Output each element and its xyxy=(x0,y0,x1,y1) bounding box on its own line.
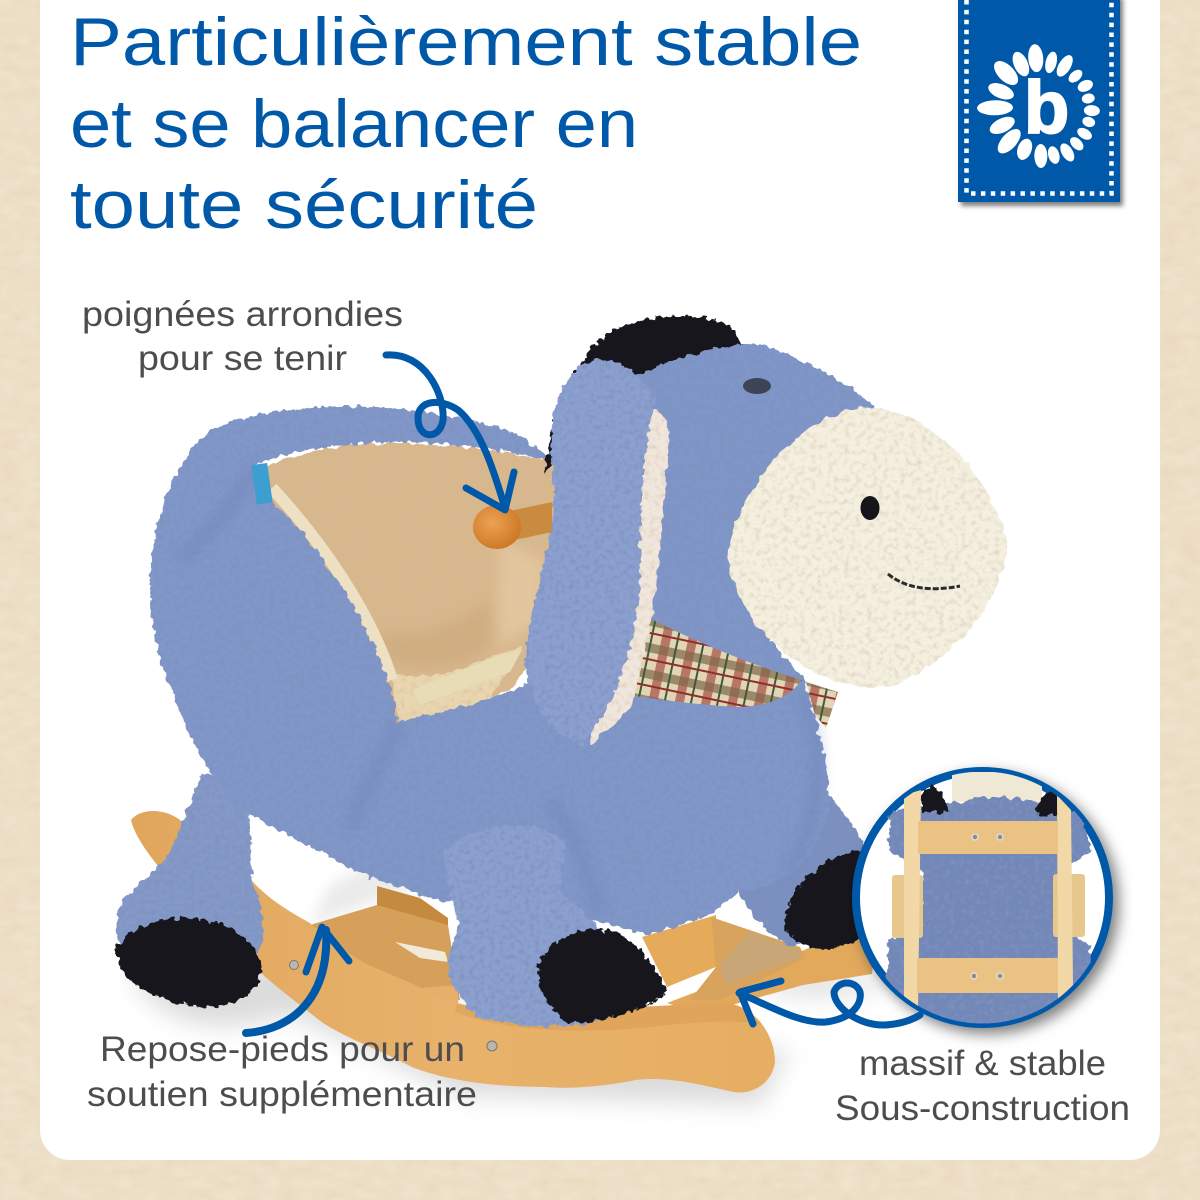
label: footrest: Repose-pieds pour un xyxy=(100,1030,465,1069)
inset screws xyxy=(971,834,1003,979)
inset rails xyxy=(904,790,921,1010)
arrow: footrest xyxy=(246,927,349,1033)
seat label xyxy=(251,463,273,505)
wooden support block xyxy=(642,915,716,987)
ear xyxy=(525,359,669,745)
footrest board xyxy=(310,905,460,1008)
rocker screws xyxy=(290,960,497,1051)
seat bottom cushion xyxy=(390,645,525,725)
arrow: underside xyxy=(739,981,920,1025)
title: toute sécurité xyxy=(70,167,538,243)
inset hooves xyxy=(922,786,1058,815)
inset side pads xyxy=(892,875,923,938)
title: Particulièrement stable xyxy=(70,4,862,80)
head xyxy=(606,344,882,682)
muzzle xyxy=(728,407,1006,688)
far back leg xyxy=(738,775,868,945)
inset cream muzzle xyxy=(952,772,1042,802)
front rocker xyxy=(131,811,775,1093)
rear leg xyxy=(116,772,263,980)
front leg xyxy=(444,826,620,1027)
inset plush body xyxy=(885,797,1095,1040)
plank recess xyxy=(720,932,800,985)
logo letter: b xyxy=(1024,66,1069,149)
arrow: handle xyxy=(386,355,514,510)
scarf xyxy=(630,612,838,728)
seat floor shade xyxy=(380,600,500,668)
logo flower xyxy=(977,44,1100,168)
label: footrest: soutien supplémentaire xyxy=(87,1075,477,1114)
label: handles: pour se tenir xyxy=(138,339,347,378)
rocking donkey xyxy=(116,316,1006,1105)
inset circle: underside xyxy=(856,771,1109,1040)
post shadow xyxy=(310,860,420,925)
rear hoof xyxy=(116,918,261,1007)
label: underside: Sous-construction xyxy=(835,1089,1130,1128)
ear outer xyxy=(525,359,655,745)
title xyxy=(70,4,862,243)
back rocker xyxy=(667,937,876,1014)
seat inner xyxy=(262,444,565,735)
label: underside: massif & stable xyxy=(859,1044,1106,1083)
inset top bar xyxy=(918,821,1058,854)
inset disc xyxy=(856,771,1109,1024)
floor shadows xyxy=(130,960,880,1105)
wooden post rear xyxy=(377,886,448,945)
label: underside xyxy=(835,1044,1130,1128)
body fold shading xyxy=(180,465,818,915)
front hoof xyxy=(538,929,667,1023)
seat strap xyxy=(412,650,522,705)
wooden handle xyxy=(473,502,552,549)
far foot xyxy=(783,850,864,949)
label: footrest xyxy=(87,1030,477,1114)
title: et se balancer en xyxy=(70,86,638,162)
inset bottom bar xyxy=(917,958,1058,993)
rear cross plank xyxy=(690,917,805,1000)
seat shell and body xyxy=(150,407,829,935)
mane xyxy=(546,316,745,475)
label: handles: poignées arrondies xyxy=(82,295,403,334)
eyes and mouth xyxy=(743,378,960,589)
seat inner fluff edge xyxy=(272,488,392,680)
ear inner xyxy=(590,409,669,745)
logo tag xyxy=(958,0,1120,202)
seat side wall shade xyxy=(490,540,545,650)
label: handles xyxy=(82,295,403,378)
rocker top highlight xyxy=(455,1003,760,1031)
